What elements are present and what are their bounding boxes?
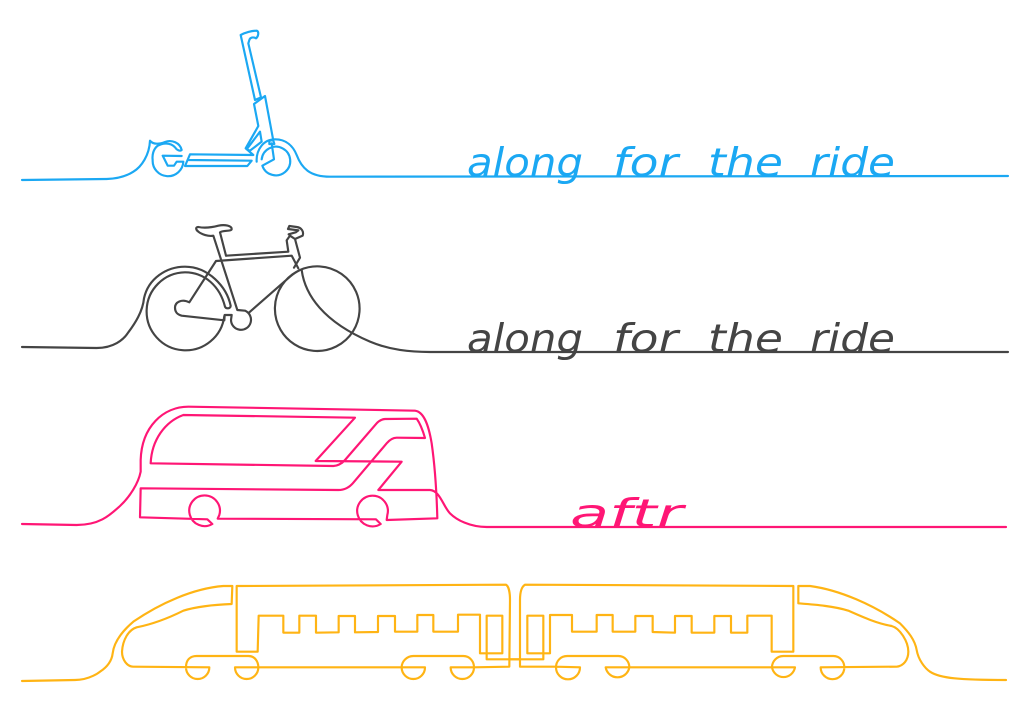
- text: along for the ride (blue): the: [708, 141, 783, 186]
- icon: train rear car line drawing: [510, 585, 1006, 680]
- icon: double-decker bus line drawing: [22, 407, 1006, 527]
- text: aftr: aftr: [570, 492, 688, 537]
- text: along for the ride (grey): along: [467, 317, 583, 362]
- text: along for the ride (grey): the: [708, 317, 783, 362]
- row: scooter: [22, 31, 1008, 186]
- icon: bicycle line drawing: [22, 225, 1008, 352]
- row: train: [22, 585, 1006, 681]
- text: along for the ride (blue): [467, 141, 895, 186]
- row: bicycle: [22, 225, 1008, 362]
- text: along for the ride (blue): for: [613, 141, 682, 186]
- text: along for the ride (grey): ride: [810, 317, 895, 362]
- text: along for the ride (blue): along: [467, 141, 583, 186]
- icon: train front car line drawing: [22, 585, 520, 681]
- row: bus: [22, 407, 1006, 537]
- text: along for the ride (grey): for: [613, 317, 682, 362]
- text: along for the ride (blue): ride: [810, 141, 895, 186]
- icon: scooter line drawing: [22, 31, 1008, 180]
- text: along for the ride (grey): [467, 317, 895, 362]
